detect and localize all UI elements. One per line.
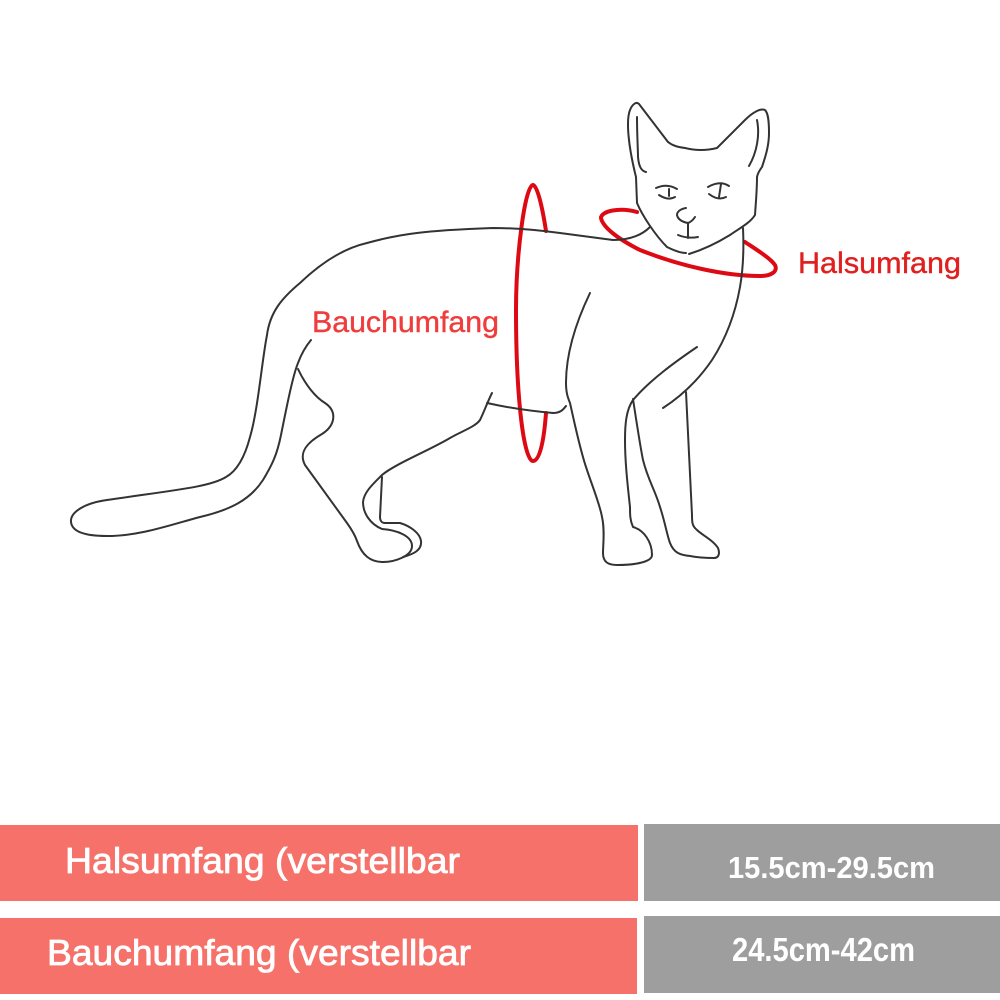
label: Halsumfang: Halsumfang	[798, 247, 961, 280]
gray value cell	[644, 824, 1000, 901]
cat back and tail	[71, 227, 650, 536]
coral label cell	[0, 918, 637, 994]
label text: Bauchumfang (verstellbar	[47, 932, 471, 973]
cat nose and mouth	[677, 208, 698, 238]
cat belly	[487, 403, 566, 413]
neck measurement ring	[601, 210, 776, 276]
cat line drawing	[71, 103, 769, 565]
value text: 15.5cm-29.5cm	[728, 850, 935, 885]
cat front leg	[566, 293, 697, 565]
label text: Halsumfang (verstellbar	[65, 840, 460, 881]
cat hind paw inner line	[380, 477, 421, 557]
coral label cell	[0, 825, 638, 901]
table row: Bauchumfang	[0, 916, 1000, 994]
belly measurement ring	[516, 185, 546, 461]
cat right eye	[708, 183, 729, 198]
cat left eye	[656, 186, 677, 199]
label: Bauchumfang: Bauchumfang	[312, 306, 499, 339]
value text: 24.5cm-42cm	[732, 931, 915, 968]
cat hind leg	[298, 369, 492, 562]
cat head	[628, 103, 769, 254]
table row: Halsumfang	[0, 824, 1000, 901]
gray value cell	[644, 916, 1000, 993]
cat second front leg	[633, 392, 719, 558]
cat chest	[663, 228, 743, 408]
